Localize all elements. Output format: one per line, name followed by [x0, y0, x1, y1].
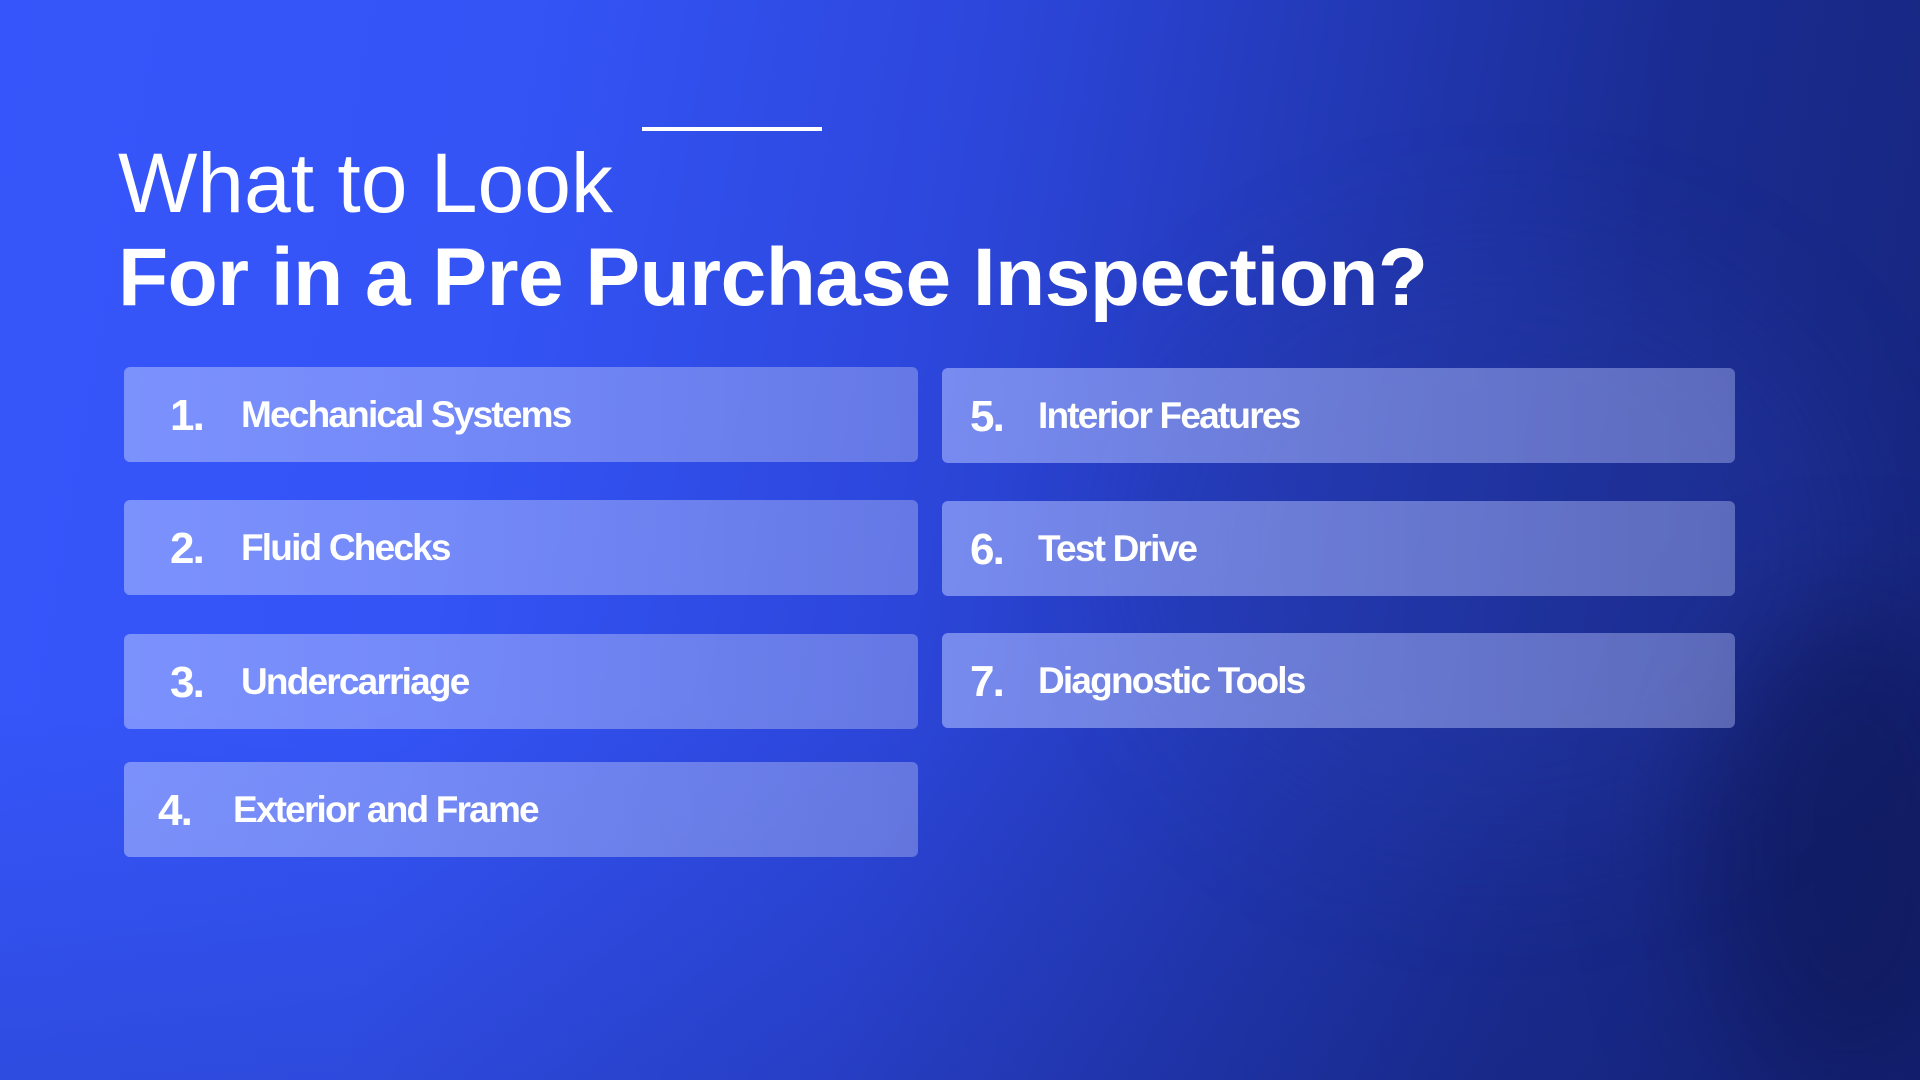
- item 7: 7.: [970, 657, 1003, 706]
- title: [118, 136, 1428, 323]
- item 4: [124, 762, 918, 857]
- item 2: Fluid Checks: [241, 527, 450, 568]
- item 5: [942, 368, 1735, 463]
- item 3: [124, 634, 918, 729]
- item 1: [124, 367, 918, 462]
- item 2: 2.: [170, 524, 203, 573]
- item 3: 3.: [170, 658, 203, 707]
- item 2: [124, 500, 918, 595]
- item 3: Undercarriage: [241, 661, 468, 702]
- item 4: Exterior and Frame: [233, 789, 538, 830]
- item 4: 4.: [158, 786, 191, 835]
- item 6: Test Drive: [1038, 528, 1196, 569]
- item 7: Diagnostic Tools: [1038, 660, 1305, 701]
- item 5: 5.: [970, 392, 1003, 441]
- item 6: [942, 501, 1735, 596]
- decorative line: [642, 127, 822, 131]
- title: What to Look: [118, 136, 613, 230]
- item 5: Interior Features: [1038, 395, 1299, 436]
- item 6: 6.: [970, 525, 1003, 574]
- item 1: 1.: [170, 391, 203, 440]
- title: For in a Pre Purchase Inspection?: [118, 232, 1428, 323]
- item 7: [942, 633, 1735, 728]
- item 1: Mechanical Systems: [241, 394, 571, 435]
